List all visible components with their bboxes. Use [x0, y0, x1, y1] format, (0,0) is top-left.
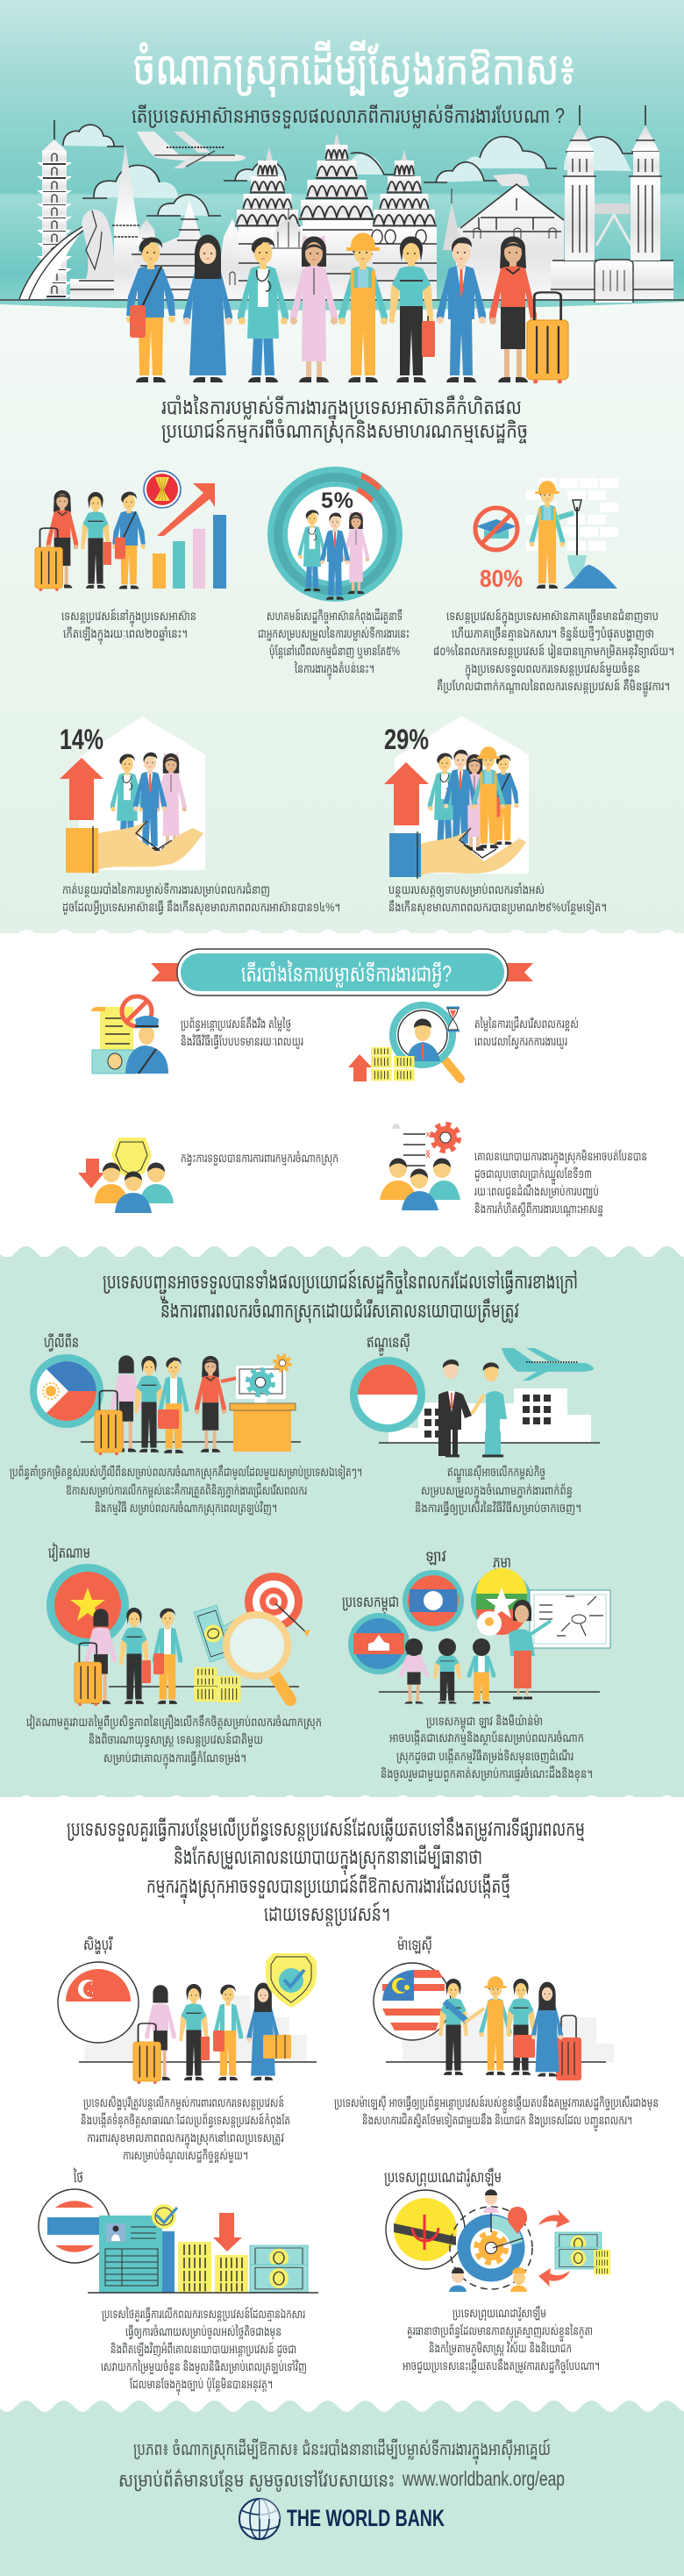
- icon: flag: [39, 2189, 110, 2263]
- panel: Vietnam: [26, 1542, 322, 1768]
- panel: Cambodia, Laos, Myanmar: [342, 1547, 610, 1781]
- label: វៀតណាម: [48, 1542, 90, 1562]
- icon: flag: [46, 1564, 129, 1646]
- text: ទេសន្តប្រវេសន៍នៅក្នុងប្រទេសអាស៊ាន: [61, 609, 196, 626]
- panel: Thailand: [39, 2166, 318, 2394]
- text: ស្រុកដូចជា បង្កើតកម្មវិធីតម្រង់ទិសមុនចេញដំណើរ: [396, 1748, 574, 1764]
- footer: more information: [118, 2467, 565, 2493]
- label: Myanmar: ភូមា: [493, 1553, 511, 1572]
- illustration: airplane: [137, 132, 246, 168]
- text: ធ្វើឲ្យការចំណាយសម្រាប់ចូលអស់ថ្លៃតិចជាងមុន: [125, 2324, 281, 2339]
- text: អាចជួយប្រទេសនេះឆ្លើយតបនឹងតម្រូវការសេដ្ឋកិច្ចបែបណា។: [403, 2358, 600, 2373]
- heading: sending countries: និងការពារពលករចំណាកស្រុកដោយជំរើសគោលនយោបាយត្រឹមត្រូវ: [160, 1298, 519, 1324]
- illustration: handshake and group: [386, 1976, 606, 2080]
- banner: what are the barriers: [151, 949, 533, 995]
- text: ប្រទេសកម្ពុជា ឡាវ និងមីយ៉ាន់ម៉ា: [426, 1714, 543, 1731]
- illustration: migrants, trainer and computer: [81, 1355, 301, 1455]
- text: និងការកំហិតស្តីពីការងារបណ្តោះអាសន្ន: [474, 1202, 603, 1217]
- panel: recruitment cost: [348, 1005, 579, 1081]
- arrow: up: [60, 758, 103, 820]
- text: [258, 609, 410, 679]
- illustration: angkor temple towers: [235, 133, 437, 299]
- illustration: building: [388, 1388, 591, 1443]
- panel: fourteen percent: [60, 717, 340, 915]
- text: និងកម្រៃតាមភូមិសាស្រ្ត វិស័យ និងនិយោជក: [429, 2340, 572, 2356]
- text: ប្រទេសថៃគួរធ្វើការលើកពលករទេសន្តប្រវេសន៍ដែលគ្មានឯកសារ: [102, 2307, 305, 2322]
- icon: money and coins: [194, 1605, 267, 1702]
- panel: Brunei: [384, 2168, 610, 2373]
- text: ប្រទេសសិង្ហបុរីត្រូវបន្តលើកកម្ពស់ការពារពលករទេសន្តប្រវេសន៍: [83, 2095, 284, 2110]
- text: រយៈពេលជូនដំណឹងសម្រាប់ការបញ្ឈប់: [474, 1184, 599, 1199]
- text: កាត់បន្ថយរបាំងនៃការបម្លាស់ទីការងារសម្រាប់ពលករជំនាញ: [62, 882, 270, 897]
- panel: lack of protection: [78, 1138, 338, 1213]
- heading: sending countries: [103, 1268, 578, 1324]
- icon: banknotes: [250, 2245, 308, 2292]
- text: សហគមន៍សេដ្ឋកិច្ចអាស៊ានកំពុងដើរតួនាទី: [267, 609, 403, 624]
- text: [81, 2095, 290, 2163]
- icon: ASEAN emblem: [144, 471, 181, 508]
- label: ថៃ: [74, 2166, 83, 2186]
- icon: skilled workers: [110, 753, 187, 851]
- icon: flag: [30, 1354, 103, 1428]
- text: តម្លៃនៃការជ្រើសរើសពលករខ្ពស់: [474, 1017, 579, 1031]
- icon: target: [245, 1573, 310, 1637]
- text: កង្វះការទទួលបានការការពារកម្មករចំណាកស្រុក: [181, 1151, 338, 1166]
- icon: brick wall: [526, 478, 618, 551]
- illustration: twin towers: [0, 105, 684, 303]
- illustration: clouds: [63, 125, 631, 216]
- icon: Laos flag: [403, 1570, 464, 1631]
- panel: Indonesia: [350, 1333, 600, 1516]
- illustration: windows, handshake: [379, 1359, 600, 1456]
- arrow: up: [384, 762, 429, 825]
- text: [403, 2306, 600, 2373]
- text: សម្របសម្រួលក្នុងចំណោមភ្នាក់ងារពាក់ព័ន្ធ: [421, 1483, 573, 1501]
- text: ដូចដែលអ្វីប្រទេសអាស៊ានធ្វើ នឹងកើនសុខមាលភាពពលករអាស៊ានបាន១៤%។: [62, 900, 340, 915]
- text: ក្នុងប្រទេសទទួលពលករទេសន្តប្រវេសន៍មួយចំនួន: [465, 661, 640, 679]
- illustration: church: [443, 174, 564, 299]
- icon: map pin: [508, 2207, 527, 2234]
- icon: magnifier: [226, 1615, 290, 1700]
- illustration: presenter and audience: [379, 1590, 610, 1704]
- backdrop: white house shape: [395, 716, 529, 874]
- text: និងកម្មវិធី សម្រាប់ពលករចំណាកស្រុកពេលត្រឡប់វិញ។: [95, 1500, 277, 1516]
- text: [62, 882, 340, 915]
- text: និងបង្កើតទំនុកចិត្តសាធារណៈដែលប្រព័ន្ធទេសន្តប្រវេសន៍កំពុងតែ: [81, 2113, 290, 2128]
- donut chart: [267, 467, 403, 602]
- text: [101, 2307, 307, 2394]
- text: គួរធានាថាប្រព័ន្ធដែលមានភាពស្មុគ្រស្មាញរបស់ខ្លួននៃកូតា: [407, 2323, 593, 2341]
- icon: magnifier, coins, arrow: [348, 1005, 460, 1081]
- text: [381, 1714, 593, 1781]
- panel: twenty-nine percent: [384, 716, 607, 915]
- icon: shield: [266, 1953, 317, 2008]
- value: 80%: [480, 565, 523, 592]
- text: ដែលមានចែងក្នុងច្បាប់ ប៉ុន្តែមិនបានអនុវត្ត។: [130, 2377, 273, 2394]
- text: កើតឡើងក្នុងរយៈពេល២០ឆ្នាំនេះ។: [63, 626, 188, 644]
- illustration: eight workers: [126, 233, 568, 383]
- illustration: merlion fountain: [19, 210, 119, 299]
- heading: barriers: [161, 394, 528, 444]
- panel: Singapore: [58, 1936, 317, 2163]
- label: ប្រទេសព្រុយណេដារ៉ូសាឡឹម: [384, 2168, 502, 2187]
- value: 14%: [60, 724, 103, 755]
- text: ប្រព័ន្ធអន្តោប្រវេសន៍តឹងរឹង តម្លៃថ្លៃ: [181, 1017, 291, 1031]
- text: ពេលវេលាស្វែករកការងារយូរ: [474, 1034, 567, 1049]
- subtitle: តើប្រទេសអាស៊ានអាចទទួលផលលាភពីការបម្លាស់ទីការងារបែបណា ?: [132, 104, 565, 129]
- panel: Philippines: [10, 1333, 362, 1516]
- text: នៃការងារក្នុងតំបន់នេះ។: [295, 661, 374, 679]
- label: សិង្ហបុរី: [83, 1936, 113, 1955]
- panel: inflexible labour policy: [380, 1124, 647, 1217]
- text: និងការធ្វើឲ្យប្រសើរនៃវិធីវិធីសម្រាប់ចាកចេញ។: [415, 1500, 581, 1516]
- icon: flag: [58, 1962, 139, 2043]
- icon: three migrants with suitcase: [35, 490, 146, 591]
- panel: strict immigration: [91, 996, 303, 1074]
- icon: hand: [389, 828, 526, 879]
- illustration: small temple cluster: [132, 200, 246, 299]
- text: និងពិតឡើងវិញអំពីគោលនយោបាយអន្តោប្រវេសន៍ ដូចជា: [110, 2341, 296, 2357]
- backdrop: faint skyline: [83, 1995, 307, 2062]
- heading: receiving countries: ដោយទេសន្តប្រវេសន៍។: [264, 1902, 390, 1927]
- banner: what are the barriers: តើរបាំងនៃការបម្លាស់ទីការងារជាអ្វី?: [241, 960, 452, 988]
- text: [10, 1464, 362, 1516]
- text: [388, 882, 607, 915]
- text: ការសម្រាប់ចំណូលសេដ្ឋកិច្ចខ្ពស់មួយ។: [123, 2148, 248, 2163]
- icon: document, no sign, officer: [91, 996, 168, 1074]
- label: ហ្វីលីពីន: [44, 1333, 79, 1352]
- panel: low skilled eighty percent: [433, 478, 674, 696]
- text: ប្រព័ន្ធគាំទ្រកម្រិតខ្ពស់របស់ហ្វីលីពីនសម្រាប់ពលករចំណាកស្រុកគឺជាមូលដែលមួយសម្រាប់ប្រទេសឯទៀតៗ។: [10, 1464, 362, 1480]
- label: Cambodia: ប្រទេសកម្ពុជា: [342, 1593, 399, 1616]
- value: 29%: [384, 724, 429, 755]
- heading: receiving countries: [67, 1816, 585, 1927]
- panel: five percent donut: [258, 467, 410, 679]
- icon: checklist, gear and workers: [380, 1124, 460, 1210]
- bar chart: [153, 515, 226, 589]
- text: ដូចជាលុបចោលប្រាក់ឈ្នួលខែទី១៣: [474, 1167, 592, 1184]
- text: សេវាយកកម្រៃមួយចំនួន និងមូលនិធិសម្រាប់ពេលត្រឡប់ទៅវិញ: [101, 2358, 307, 2374]
- icon: shield and workers: [78, 1138, 174, 1213]
- arrow: rising: [157, 483, 215, 536]
- illustration: left pagoda: [37, 120, 72, 298]
- illustration: migrants: [75, 1608, 299, 1706]
- text: [433, 609, 674, 696]
- icon: skilled workers: [298, 510, 369, 600]
- text: នឹងកើនសុខមាលភាពពលករបានប្រមាណ២៩%បន្ថែមទៀត។: [388, 899, 607, 915]
- logo: World Bank: [239, 2499, 445, 2539]
- text: អាចបង្កើតជាសេវាកម្មនិងស្ថាប័នសម្រាប់ពលករចំណាក: [389, 1730, 584, 1745]
- text: [415, 1465, 581, 1516]
- text: ការពារសុខមាលភាពពលករក្នុងស្រុកនៅពេលប្រទេសត្រូវ: [87, 2130, 284, 2148]
- icon: coins: [178, 2242, 248, 2293]
- arrows: exchange: [538, 2209, 570, 2287]
- value: 5%: [321, 489, 353, 513]
- text: [334, 2095, 659, 2130]
- label: Laos: ឡាវ: [425, 1547, 446, 1566]
- text: ឱកាសសម្រាប់ការលើកកម្ពស់នេះគឺការត្រួតពិនិត្យភ្នាក់ងារជ្រើសរើសពលករ: [66, 1483, 307, 1498]
- text: ឥណ្ឌូនេស៊ីអាចលើកកម្ពស់កិច្ច: [447, 1465, 545, 1482]
- icon: Cambodia flag: [348, 1613, 410, 1674]
- heading: barriers: ប្រយោជន៍កម្មករពីចំណាកស្រុកនិងសមាហរណកម្មសេដ្ឋកិច្ច: [161, 418, 528, 444]
- icon: worker with shovel: [530, 481, 617, 589]
- text: និងវិធីវិធីធ្វើបែបបទមានរយៈពេលយូរ: [181, 1033, 303, 1049]
- icon: flag: [350, 1357, 425, 1432]
- label: ម៉ាឡេស៊ី: [397, 1936, 432, 1955]
- icon: identity document: [99, 2204, 177, 2293]
- panel: migration rising: [35, 471, 226, 644]
- text: និងពិចារណាយុទ្ធសាស្រ្ត ទេសន្តប្រវេសន៍ជាតិមួយ: [89, 1732, 263, 1747]
- icon: flag: [374, 1963, 451, 2040]
- arrow: down: [213, 2213, 242, 2251]
- footer: more information: សម្រាប់ព័ត៌មានបន្ថែម សូមចូលទៅវែបសាយនេះ: [118, 2468, 395, 2493]
- heading: receiving countries: កម្មករក្នុងស្រុកអាចទទួលបានប្រយោជន៍ពីឱកាសការងារដែលបង្កើតថ្មី: [146, 1873, 510, 1904]
- text: និងចូលរួមជាមួយពួកគាត់សម្រាប់ការផ្ទេរចំណេះដឹងនិងខុន។: [381, 1766, 593, 1781]
- icon: banknotes and coins: [555, 2232, 610, 2275]
- illustration: cloud outlines: [63, 125, 633, 216]
- icon: hand: [66, 821, 203, 874]
- heading: receiving countries: និងកែសម្រួលគោលនយោបាយក្នុងស្រុកនានាដើម្បីធានាថា: [174, 1844, 482, 1875]
- text: [26, 1714, 322, 1768]
- backdrop: white house shape: [79, 717, 205, 870]
- text: [181, 1017, 303, 1049]
- text: បន្ថយរបសត្តឲ្យទាបសម្រាប់ពលករទាំងអស់: [388, 882, 545, 897]
- text: [61, 609, 196, 644]
- text: សម្រាប់ជាគោលក្នុងការធ្វើកំណែទម្រង់។: [103, 1751, 246, 1768]
- icon: workers group: [428, 746, 518, 851]
- chart: wheel with gear: [450, 2207, 532, 2289]
- icon: flag: [386, 2190, 465, 2269]
- backdrop: faint skyline: [403, 2013, 614, 2062]
- heading: barriers: របាំងនៃការបម្លាស់ទីការងារក្នុងប្រទេសអាស៊ានគឺកំហិតផល: [161, 394, 522, 425]
- text: [474, 1017, 579, 1049]
- footer: source: ប្រភព៖ ចំណាកស្រុកដើម្បីឱកាស៖ ជំនះរបាំងនានាដើម្បីបម្លាស់ទីការងារក្នុងអាស៊ីអាគ្នេយ៍: [133, 2437, 551, 2465]
- text: ជាអ្នកសម្របសម្រួលនៃការបម្លាស់ទីការងារនេះ: [258, 626, 410, 641]
- text: [474, 1149, 647, 1217]
- icon: teal airplane: [502, 1348, 594, 1381]
- icon: Myanmar flag: [471, 1568, 532, 1636]
- icon: workers around wheel: [449, 2189, 527, 2292]
- label: ឥណ្ឌូនេស៊ី: [367, 1333, 410, 1356]
- text: ប៉ុន្តែនៅលើពលកម្មជំនាញ ឬមានតែ៥%: [269, 644, 400, 659]
- panel: Malaysia: [334, 1936, 659, 2130]
- icon: no graduation sign: [475, 508, 517, 550]
- logo: World Bank: THE WORLD BANK: [287, 2505, 445, 2531]
- text: វៀតណាមគួរវាយតម្លៃពីប្រសិទ្ធភាពនៃគ្រឿងលើកទឹកចិត្តសម្រាប់ពលករចំណាកស្រុក: [26, 1714, 322, 1730]
- text: ប្រទេសព្រុយណេដារ៉ូសាឡឹម: [452, 2306, 546, 2321]
- illustration: stupa: [112, 145, 140, 299]
- footer: more information: www.worldbank.org/eap: [402, 2467, 565, 2490]
- illustration: migrants: [79, 1983, 317, 2084]
